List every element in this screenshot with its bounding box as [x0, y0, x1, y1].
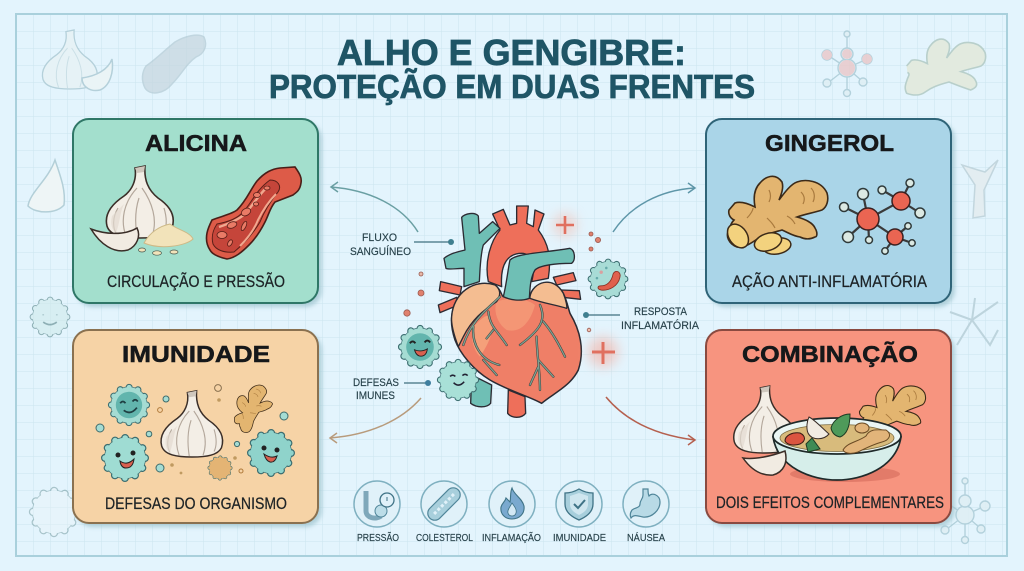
aorta: [487, 206, 550, 287]
title line 1: ALHO E GENGIBRE:: [337, 32, 686, 73]
icon: spiky cell: [250, 432, 292, 474]
heading: combinacao: COMBINAÇÃO: [742, 340, 918, 367]
icon: inflamacao: [489, 481, 535, 527]
label: resposta inflamatoria: RESPOSTA: [634, 306, 688, 318]
arrow: to imunidade: [330, 398, 421, 443]
icon: garlic: [734, 386, 796, 453]
faint vessel top left: [142, 35, 206, 93]
title line 2: PROTEÇÃO EM DUAS FRENTES: [269, 68, 755, 105]
icon: spice cluster: [209, 457, 231, 479]
faint nerve right: [950, 298, 998, 345]
icon: blood vessel: [206, 167, 301, 259]
label: fluxo sanguineo: [350, 232, 454, 258]
inflammatory cell: [590, 261, 626, 297]
label: fluxo sanguineo: FLUXO: [362, 232, 397, 244]
left atrium: [452, 283, 500, 347]
icon: ginger root: [723, 176, 828, 256]
arrow: to alicina: [331, 182, 418, 232]
label: colesterol: COLESTEROL: [416, 533, 473, 544]
label: resposta inflamatoria: INFLAMATÓRIA: [621, 319, 700, 332]
inflammation spark top: [553, 213, 577, 237]
icon: garlic and powder: [91, 166, 193, 255]
faint garlic top left: [42, 30, 97, 89]
faint cell left: [32, 299, 68, 335]
label: defesas imunes: [353, 377, 431, 402]
icon: ginger: [856, 382, 929, 437]
panel: combinacao: [706, 330, 955, 527]
label: inflamacao: INFLAMAÇÃO: [482, 531, 541, 544]
icon: garlic: [161, 391, 223, 457]
faint cell lower left: [32, 490, 76, 534]
faint ginger top right: [905, 39, 986, 95]
icon: ginger: [224, 380, 280, 435]
caption: combinacao: DOIS EFEITOS COMPLEMENTARES: [716, 493, 944, 512]
icon: imunidade: [556, 481, 602, 527]
faint clove top left: [82, 59, 112, 90]
label: fluxo sanguineo: SANGUÍNEO: [350, 245, 411, 258]
inflammation spark bottom: [588, 337, 618, 367]
label: defesas imunes: DEFESAS: [353, 377, 399, 389]
right atrium: [530, 282, 567, 308]
heading: gingerol: GINGEROL: [765, 130, 894, 156]
faint molecule lower right: [940, 478, 990, 544]
icon: nausea: [623, 481, 669, 527]
icon: colesterol: [421, 481, 467, 527]
panel: gingerol: [706, 119, 955, 307]
panel: imunidade: [73, 330, 322, 527]
immune cell: smiling: [401, 328, 439, 366]
inflammation particles: [404, 232, 601, 332]
central heart illustration: [438, 206, 581, 417]
icon: bowl of food: [773, 414, 901, 482]
label: imunidade: IMUNIDADE: [553, 533, 606, 544]
label: resposta inflamatoria: [583, 306, 700, 332]
label: defesas imunes: IMUNES: [356, 390, 395, 402]
caption: alicina: CIRCULAÇÃO E PRESSÃO: [107, 272, 285, 291]
caption: gingerol: AÇÃO ANTI-INFLAMATÓRIA: [732, 272, 928, 291]
faint molecule top right: [822, 31, 872, 96]
red veins and lower vessels: [438, 273, 581, 417]
decorative dots: [96, 385, 288, 474]
arrow: to combinacao: [606, 397, 695, 445]
faint clove left: [28, 160, 64, 212]
heading: alicina: ALICINA: [145, 130, 247, 156]
icon: pressao: [354, 481, 400, 527]
coronary vessels: [463, 297, 565, 390]
label: pressao: PRESSÃO: [357, 531, 399, 544]
faint vessel right: [962, 160, 998, 218]
panel: alicina: [73, 119, 322, 307]
icon: garlic clove: [743, 451, 786, 475]
superior vena cava: [444, 213, 500, 287]
heart body: [451, 283, 581, 403]
icon: gingerol molecule: [840, 179, 925, 254]
pulmonary artery: [503, 248, 574, 300]
title: [269, 32, 755, 105]
arrow: to gingerol: [613, 183, 695, 232]
immune cell: light: [440, 362, 476, 398]
bottom icon row: [354, 481, 669, 544]
heading: imunidade: IMUNIDADE: [122, 341, 270, 367]
caption: imunidade: DEFESAS DO ORGANISMO: [105, 494, 287, 513]
label: nausea: NÁUSEA: [627, 531, 665, 544]
icon: smiling cell: [111, 387, 147, 423]
icon: happy cell: [104, 437, 146, 479]
ventricle highlights: [495, 299, 535, 331]
